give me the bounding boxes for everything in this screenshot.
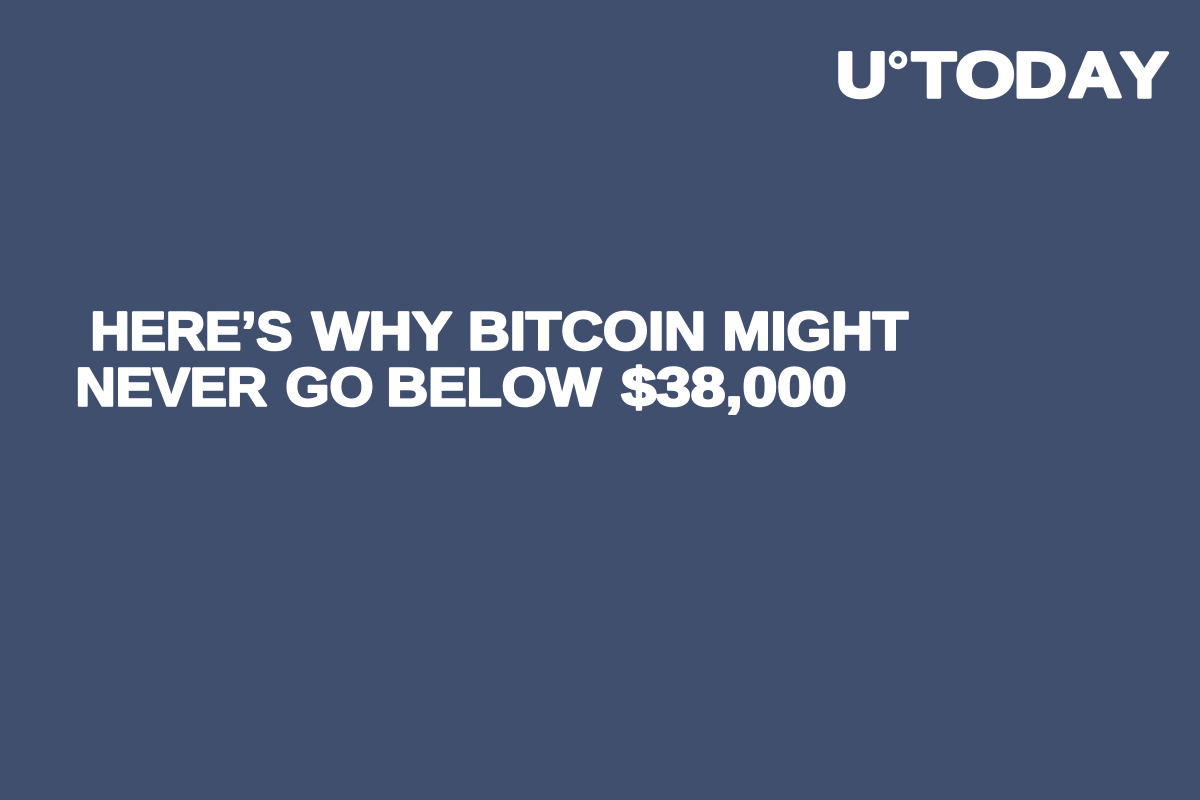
- title: HERE’S: [90, 302, 292, 362]
- title: NEVER: [76, 358, 267, 418]
- title: BITCOIN: [468, 302, 706, 362]
- logo: U.Today: A: [1068, 39, 1122, 111]
- title: WHY: [312, 302, 452, 362]
- title: [76, 302, 908, 418]
- logo: U.Today: U: [836, 39, 887, 111]
- logo: U.Today: D: [1014, 39, 1067, 111]
- logo: U.Today: Y: [1120, 39, 1168, 111]
- title: GO: [286, 358, 374, 418]
- logo: U.Today: [836, 39, 1168, 111]
- title: MIGHT: [722, 302, 908, 362]
- title: BELOW: [386, 358, 601, 418]
- logo: U.Today: T: [912, 39, 956, 111]
- title: $38,000: [622, 358, 846, 418]
- logo: U.Today: O: [955, 39, 1015, 111]
